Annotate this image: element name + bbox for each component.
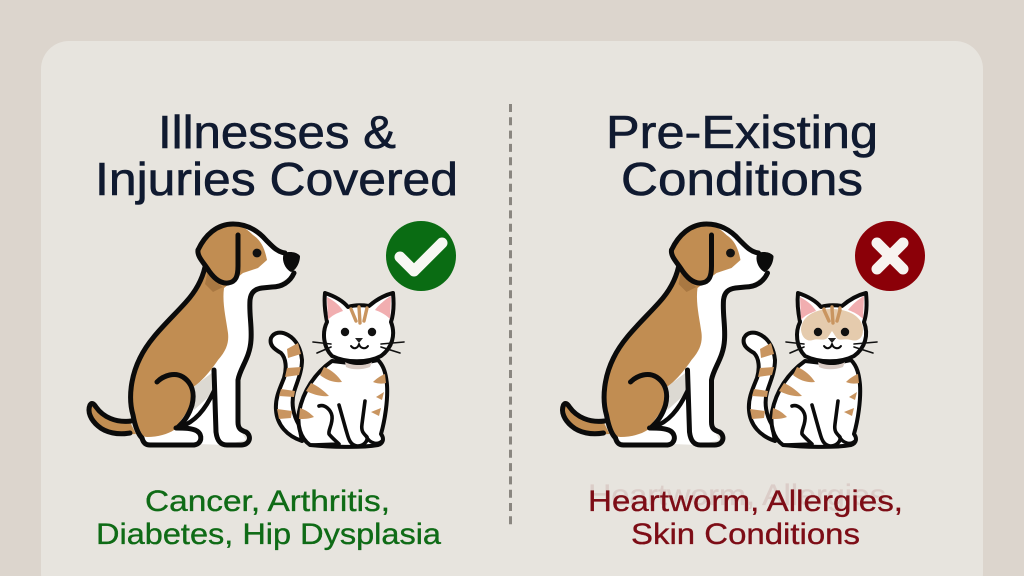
illustration: cat [271,293,404,447]
icon: green check mark [386,221,456,291]
center divider [509,104,512,527]
heading: illnesses and injuries covered [95,106,458,205]
heading: pre-existing conditions [606,106,878,205]
text: excluded conditions: Skin Conditions [631,518,860,551]
panel: covered [89,106,458,551]
illustration: cat with tan face [744,293,877,447]
heading: pre-existing conditions: Conditions [621,153,863,205]
illustration: dog [562,224,774,445]
panel: pre-existing [562,106,925,551]
icon: red cross [855,221,925,291]
heading: illnesses and injuries covered: Injuries Covered [95,153,458,205]
heading: pre-existing conditions: Pre-Existing [606,106,878,158]
text: excluded conditions: Heartworm, Allergies, [588,485,903,518]
text: ghosted line: Heartworm, Allergies [588,479,886,512]
heading: illnesses and injuries covered: Illnesses & [158,106,396,158]
text: excluded conditions [588,485,903,551]
illustration: dog [89,224,300,445]
text: covered conditions [96,485,441,551]
text: covered conditions: Diabetes, Hip Dysplasia [96,518,441,551]
text: covered conditions: Cancer, Arthritis, [145,485,390,518]
